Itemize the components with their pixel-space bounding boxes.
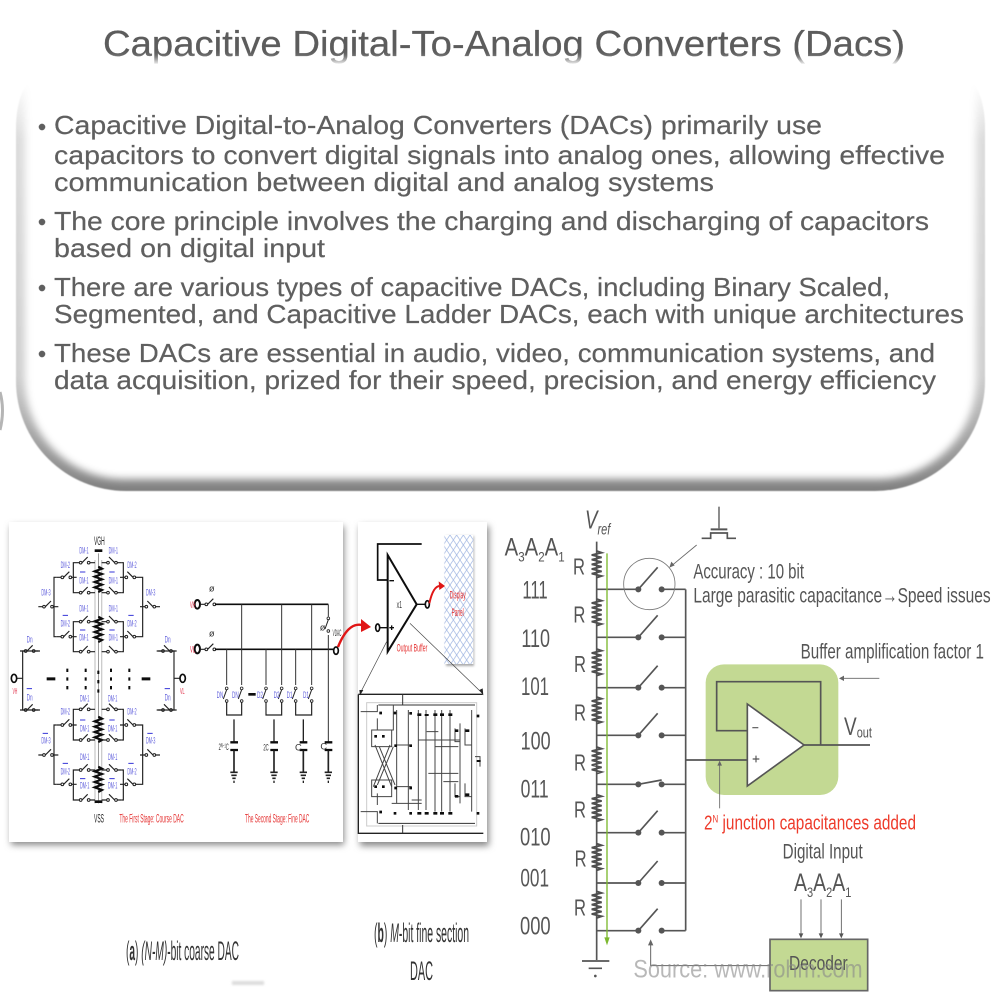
coarse DAC resistor string and switches: DM-3 — [41, 735, 51, 745]
coarse DAC resistor string and switches: DM-1 — [79, 633, 89, 643]
faint illegible smudge below caption — [232, 981, 264, 985]
digital input label: Digital Input — [783, 839, 863, 863]
resistor labels: R — [575, 846, 587, 872]
decoder input arrows — [799, 899, 844, 938]
buffer op-amp — [686, 682, 870, 786]
output buffer op-amp and display panel: Panel — [452, 607, 464, 619]
decoder box — [770, 939, 868, 991]
coarse DAC resistor string and switches: DM-2 — [61, 618, 70, 628]
label: A3A2A1 header: A — [525, 534, 539, 561]
fine DAC capacitor array: The Second Stage: Fine DAC — [245, 812, 309, 826]
title: Capacitive Digital-To-Analog Converters (Dacs) — [103, 23, 905, 64]
bullet list: The core principle involves the charging and discharging of capacitors — [54, 206, 929, 236]
output buffer op-amp and display panel: Display — [450, 589, 466, 601]
fine DAC capacitor array: VH — [190, 600, 195, 610]
coarse DAC resistor string and switches: DM-1 — [108, 694, 117, 704]
red capacitance note: N — [713, 814, 718, 826]
coarse DAC resistor string and switches: DM-1 — [109, 633, 118, 643]
decoder inputs label: 1 — [845, 884, 852, 900]
code labels: 011 — [521, 775, 549, 803]
decoder inputs label: 2 — [826, 884, 832, 900]
coarse DAC resistor string and switches: DM-1 — [109, 604, 118, 614]
label: Vout: out — [857, 726, 872, 742]
code labels — [520, 577, 551, 941]
bullet list: Capacitive Digital-to-Analog Converters (DACs) primarily use — [54, 110, 822, 140]
panel: coarse and fine DAC schematic card — [9, 522, 344, 845]
output buffer op-amp and display panel: Output Buffer — [397, 642, 427, 654]
label: Vref: ref — [597, 521, 612, 538]
fine DAC capacitor array: C — [295, 743, 302, 753]
coarse DAC resistor string and switches: DM-2 — [127, 767, 137, 777]
coarse DAC resistor string and switches: VGH — [94, 534, 105, 548]
resistor labels: R — [574, 797, 586, 823]
arrow: red arrow from fine DAC to output buffer — [338, 619, 371, 647]
label: A3A2A1 header: 2 — [538, 548, 545, 564]
decoder inputs label: A — [813, 870, 827, 897]
buffer arrow — [839, 676, 879, 681]
coarse DAC resistor string and switches: DM-2 — [127, 707, 137, 717]
label: A3A2A1 header: A — [545, 534, 559, 561]
bullet list — [39, 110, 964, 395]
fine DAC capacitor array: C — [320, 741, 327, 751]
green current arrow — [604, 553, 610, 945]
red capacitance note: 2 — [704, 811, 715, 834]
resistor labels: R — [574, 700, 586, 726]
resistor labels: R — [573, 554, 585, 580]
label: A3A2A1 header: 3 — [518, 548, 525, 564]
text: (b) M-bit fine section — [374, 918, 469, 948]
watermark: Source: www.rohm.com — [633, 956, 863, 983]
red capacitance note: junction capacitances added — [718, 811, 916, 834]
label: Vref: V — [585, 504, 602, 534]
code labels: 100 — [521, 728, 551, 756]
resistor labels: R — [574, 750, 586, 776]
coarse DAC resistor string and switches: DM-1 — [80, 780, 89, 790]
buffer green highlight — [706, 664, 838, 795]
bullet list: data acquisition, prized for their speed, precision, and energy efficiency — [54, 365, 936, 395]
fine DAC capacitor array: D1 — [287, 690, 293, 700]
coarse DAC resistor string and switches: DM-1 — [79, 575, 89, 585]
text: (a) (N-M)-bit coarse DAC — [126, 936, 239, 966]
coarse DAC resistor string and switches: Dn — [165, 693, 171, 703]
label: Vout: V — [844, 713, 861, 741]
coarse DAC resistor string and switches: DM-1 — [109, 575, 118, 585]
bullet list: Segmented, and Capacitive Ladder DACs, each with unique architectures — [54, 299, 964, 329]
coarse DAC resistor string and switches: Dn — [165, 634, 171, 644]
coarse DAC resistor string and switches: DM-1 — [80, 694, 89, 704]
bullet list: capacitors to convert digital signals into analog ones, allowing effective — [54, 140, 945, 170]
fine DAC capacitor array — [190, 584, 341, 826]
fine DAC capacitor array: ø — [320, 623, 326, 633]
icon: pulse transistor — [702, 507, 736, 538]
code labels: 000 — [520, 913, 551, 941]
coarse DAC resistor string and switches: Dn — [27, 634, 33, 644]
coarse DAC resistor string and switches: DM-1 — [108, 780, 117, 790]
label: A3A2A1 header: A — [505, 534, 521, 561]
fine DAC capacitor array: D2 — [274, 690, 280, 700]
fine DAC capacitor array: VL — [190, 644, 195, 654]
resistor labels: R — [573, 602, 585, 628]
resistor labels — [573, 554, 587, 920]
coarse DAC resistor string and switches: DM-1 — [80, 724, 89, 734]
coarse DAC resistor string and switches: DM-1 — [108, 752, 117, 762]
panel: summary card — [0, 60, 985, 491]
panel: resistor string DAC diagram — [505, 504, 991, 991]
code labels: 001 — [520, 865, 549, 893]
coarse DAC resistor string and switches: DM-2 — [127, 618, 137, 628]
fine DAC capacitor array: DN — [217, 690, 223, 700]
decoder control line — [648, 939, 770, 966]
bullet list: based on digital input — [54, 233, 326, 263]
panel: output buffer schematic card — [358, 522, 489, 846]
coarse DAC resistor string and switches: DM-3 — [146, 588, 155, 598]
coarse DAC resistor string and switches: DM-2 — [61, 560, 70, 570]
decoder inputs label: A — [832, 870, 846, 897]
coarse DAC resistor string and switches: DM-1 — [108, 724, 117, 734]
caption: fine section DAC — [374, 918, 469, 986]
bullet list: There are various types of capacitive DACs, including Binary Scaled, — [54, 272, 890, 302]
coarse DAC resistor string and switches: DM-3 — [146, 735, 155, 745]
label: A3A2A1 header: 1 — [558, 548, 565, 564]
code labels: 101 — [521, 673, 549, 701]
accuracy note — [693, 560, 991, 607]
resistor ladder — [582, 542, 609, 977]
fine DAC capacitor array: 2ᴺ⁻¹C — [219, 742, 229, 752]
decoder inputs label: 3 — [807, 884, 813, 900]
bullet list: communication between digital and analog systems — [54, 167, 714, 197]
fine DAC capacitor array: D2 — [257, 690, 263, 700]
bullet list: These DACs are essential in audio, video, communication systems, and — [54, 338, 935, 368]
decoder inputs label: A — [794, 870, 810, 897]
code labels: 010 — [520, 823, 551, 851]
fine DAC capacitor array: D1 — [303, 690, 309, 700]
fine DAC capacitor array: 2C — [263, 743, 269, 753]
panel: coarse and fine DAC schematic card: The First Stage: Course DAC — [119, 812, 184, 826]
output buffer op-amp and display panel: x1 — [397, 600, 402, 611]
code labels: 110 — [521, 625, 550, 653]
fine DAC capacitor array: ø — [209, 629, 215, 639]
code labels: 111 — [522, 577, 548, 605]
coarse DAC resistor string and switches: DM-2 — [61, 707, 70, 717]
resistor labels: R — [574, 894, 586, 920]
coarse DAC resistor string and switches: VL — [180, 686, 185, 696]
coarse DAC resistor string and switches: DM-1 — [79, 604, 89, 614]
output buffer op-amp and display panel — [359, 535, 483, 695]
fine DAC capacitor array: DN — [232, 690, 239, 700]
coarse DAC resistor string and switches: Dn — [27, 693, 33, 703]
coarse DAC resistor string and switches: DM-2 — [127, 560, 137, 570]
text: VDAC — [333, 628, 341, 638]
coarse DAC resistor string and switches: DM-2 — [61, 767, 70, 777]
resistor labels: R — [574, 651, 586, 677]
coarse DAC resistor string and switches: DM-3 — [41, 588, 51, 598]
coarse DAC resistor string and switches: VH — [13, 686, 17, 696]
coarse DAC resistor string and switches: DM-1 — [80, 752, 89, 762]
decoder box: Decoder — [789, 952, 848, 975]
coarse DAC resistor string and switches: DM-1 — [79, 545, 89, 555]
transistor-level amplifier circuit — [358, 694, 483, 833]
coarse DAC resistor string and switches — [11, 534, 185, 826]
accuracy note: Accuracy : 10 bit — [693, 560, 804, 584]
switch bank — [597, 545, 697, 934]
coarse DAC resistor string and switches: VSS — [94, 812, 104, 826]
coarse DAC resistor string and switches: DM-1 — [109, 545, 118, 555]
fine DAC capacitor array: ø — [209, 584, 215, 594]
caption: fine section DAC: DAC — [410, 956, 433, 986]
capacitance arrow — [717, 761, 722, 808]
